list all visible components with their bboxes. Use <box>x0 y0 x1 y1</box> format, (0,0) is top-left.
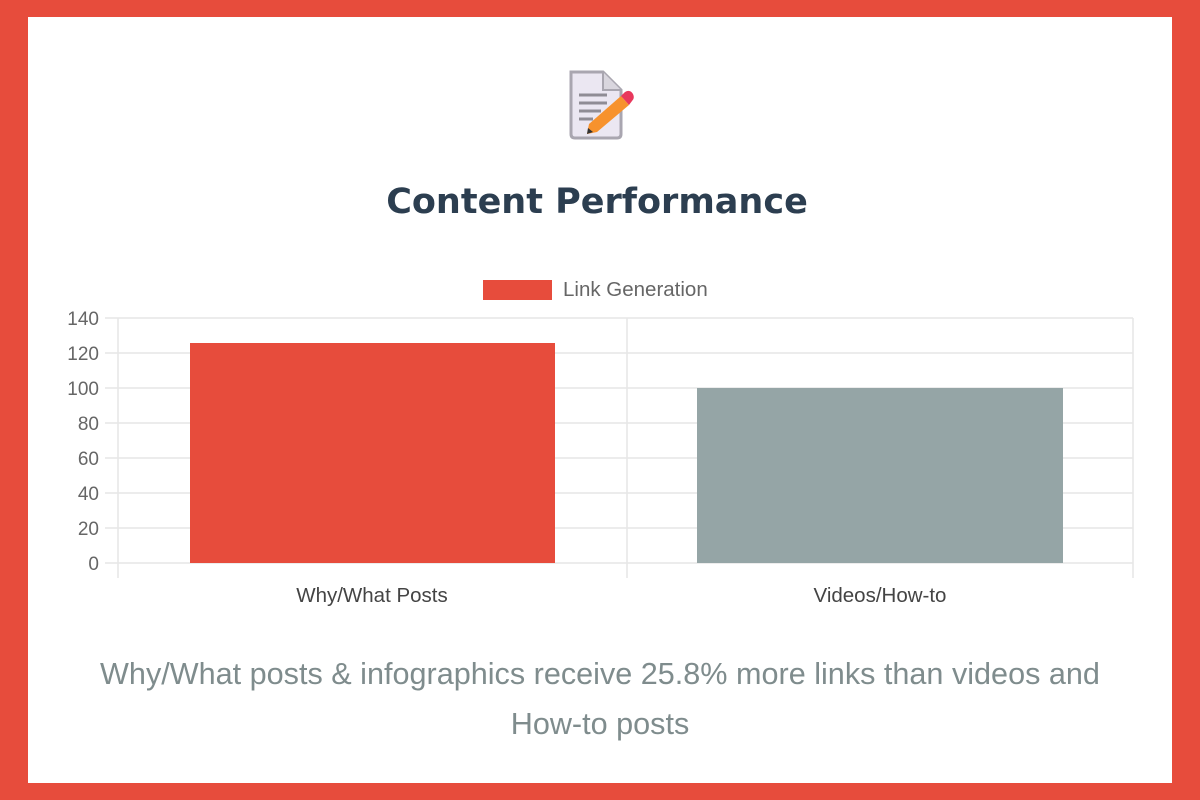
y axis labels: 60 <box>78 449 99 470</box>
bar: Videos/How-to <box>697 388 1063 563</box>
bar chart <box>67 278 1134 607</box>
caption: Why/What posts & infographics receive 25.8% more links than videos and How-to posts <box>100 657 1100 741</box>
y axis labels: 0 <box>88 554 99 575</box>
y axis labels: 120 <box>67 344 99 365</box>
bar: Why/What Posts <box>190 343 555 563</box>
y axis labels: 140 <box>67 309 99 330</box>
legend <box>483 278 708 301</box>
legend: Link Generation <box>563 278 708 301</box>
x axis labels: Why/What Posts <box>296 584 448 607</box>
y axis labels: 80 <box>78 414 99 435</box>
x axis labels: Videos/How-to <box>814 584 946 607</box>
x axis labels <box>296 584 946 607</box>
title: Content Performance <box>386 182 808 222</box>
icon: document with pencil <box>570 70 634 140</box>
y axis labels: 20 <box>78 519 99 540</box>
y axis labels: 100 <box>67 379 99 400</box>
y axis labels: 40 <box>78 484 99 505</box>
y axis labels <box>67 309 99 575</box>
